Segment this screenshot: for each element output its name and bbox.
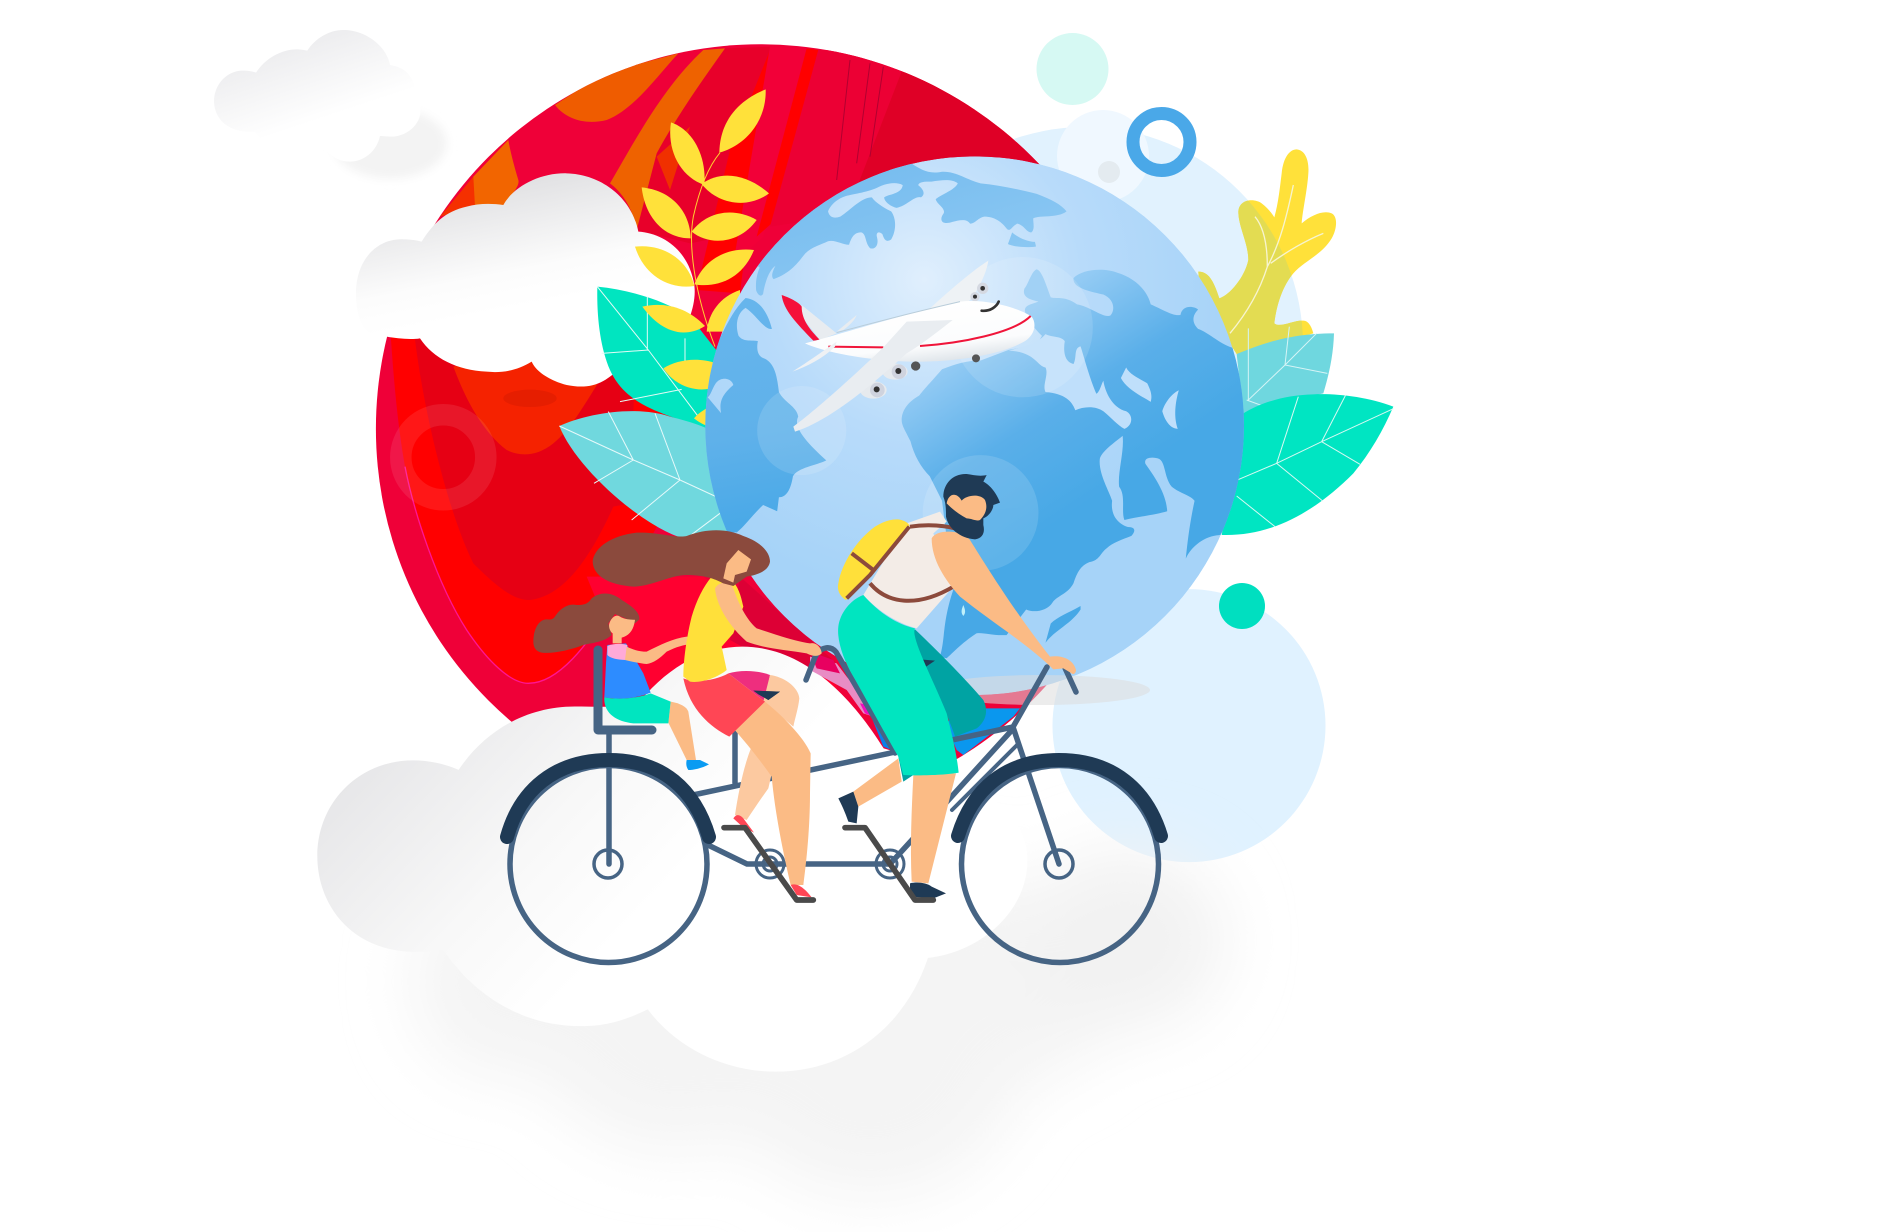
pale teal circle [1036, 33, 1108, 105]
big cloud ground shadow [412, 850, 1225, 1197]
teal left leaf [597, 287, 727, 430]
tandem bicycle [507, 648, 1161, 962]
child rider [533, 594, 709, 770]
shadow band near front handlebars [930, 675, 1150, 705]
pedal cranks [724, 828, 933, 900]
bright blue and magenta patches under rider [810, 652, 1020, 755]
red swirling sun disc [376, 44, 1046, 760]
aqua right leaf [1237, 327, 1334, 413]
pale blue circle behind globe [867, 127, 1303, 563]
continent: outlying spike [1045, 606, 1081, 643]
yellow plant [1198, 149, 1336, 354]
frame tubes [609, 648, 1076, 864]
left plant group [559, 89, 769, 539]
medium cloud upper left [356, 173, 695, 387]
globe [693, 146, 1261, 695]
light land patches [1009, 334, 1179, 429]
yellow plant tinted inside pale circle [1198, 200, 1303, 354]
blue ring [1133, 114, 1190, 170]
continent: western landmass [693, 298, 826, 532]
second down tube [952, 745, 1017, 810]
faint ring on sun [401, 415, 486, 500]
chainrings [756, 850, 904, 878]
wheat stalk [635, 89, 769, 427]
faint white circle with dot [1057, 110, 1149, 202]
big cloud under bicycle [317, 647, 1027, 1072]
teal dot [1219, 583, 1265, 629]
faint globe circles [757, 257, 1093, 571]
pale blue circle lower right [1052, 589, 1326, 862]
child seat [598, 650, 652, 730]
woman rider [593, 530, 822, 897]
aqua left leaf [559, 411, 730, 539]
continent: northern land [756, 164, 1066, 296]
front wheel [962, 766, 1158, 962]
fenders [507, 760, 1161, 837]
man rider [838, 474, 1076, 898]
right plant group [1198, 149, 1393, 535]
teal right leaf [1222, 394, 1393, 535]
illustration: family on tandem bicycle with globe [214, 30, 1394, 1172]
continent: main eastern landmass [902, 269, 1261, 658]
airplane [782, 261, 1034, 432]
plant veins [1230, 185, 1323, 333]
rear wheel [510, 766, 707, 962]
small cloud top left with shadow [214, 30, 447, 178]
